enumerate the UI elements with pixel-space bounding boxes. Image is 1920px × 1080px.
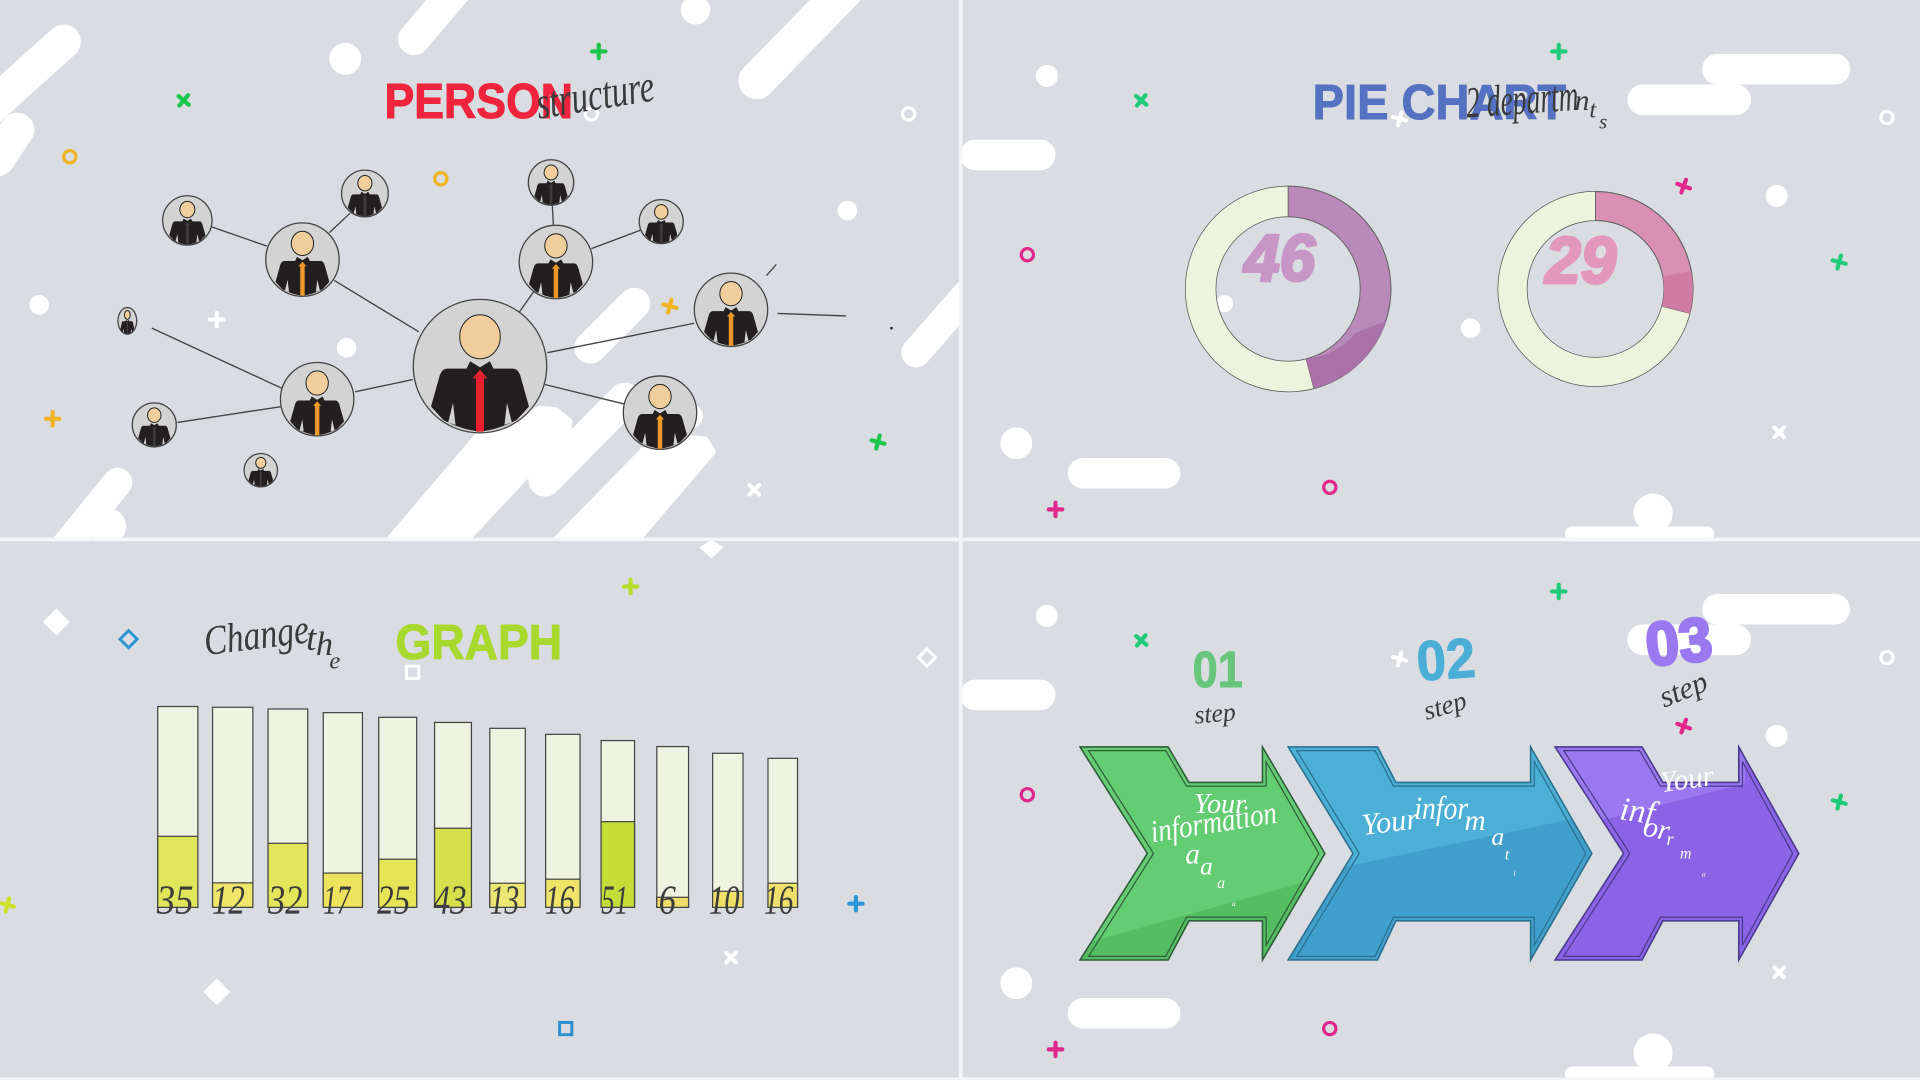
step 03 heading: 03 [1642,605,1715,679]
background shapes: graph panel [43,540,936,1005]
person: right lead [694,273,768,346]
arrow text: a [1217,875,1225,892]
bar: 51 [601,741,635,923]
arrow text: Your [1360,801,1420,842]
arrow text: t [1505,847,1510,864]
bar: 17 [323,713,362,923]
title: Change the GRAPH: Change [201,607,311,665]
arrow text: m [1680,845,1691,862]
connecting lines [152,204,846,422]
bar: 12 [212,707,253,923]
arrow: step 3 purple [1553,744,1799,960]
arrow text [1618,760,1717,879]
arrow text: or [1641,811,1673,847]
arrow: step 1 green [1078,747,1329,962]
title: Change the GRAPH: h [316,625,333,663]
value: 29: 29 [1543,224,1617,298]
donut chart: 29 [1512,192,1693,372]
person: team member [163,196,212,245]
markers: steps panel [1021,585,1847,1056]
bar: 17: 17 [323,877,352,923]
person: lower left lead [280,362,354,436]
step 01 heading [1193,640,1243,730]
bar: 32 [267,709,308,923]
person: central manager [413,299,547,433]
bar: 16: 16 [545,877,574,923]
donut chart: 46 [1201,186,1391,389]
arrow text [1148,789,1279,908]
bar: 6: 6 [659,877,676,923]
bar: 16 [764,758,798,923]
title: PIE CHART 2 department: PIE CHART [1313,76,1566,130]
bar: 43 [433,722,471,923]
person: lower right lead [623,376,697,449]
title: Change the GRAPH [201,607,562,675]
title: Change the GRAPH: GRAPH [396,616,562,670]
bar: 16: 16 [764,877,794,923]
bar: 10: 10 [709,877,740,923]
step 01 heading: 01 [1193,640,1243,698]
person: team member [342,170,388,217]
person: team member [132,403,176,447]
markers: graph panel [0,580,863,1035]
person: upper right lead [519,225,593,299]
segment: 29 percent [1596,192,1693,313]
step 01 heading: step [1193,697,1237,730]
arrow text: a [1232,899,1236,908]
arrow text: infor [1414,791,1468,827]
arrow text: information [1148,795,1279,849]
arrow text: a [1200,851,1213,880]
title: PIE CHART 2 department: t [1589,97,1597,124]
bar: 16 [545,734,580,923]
arrow text: a [1491,822,1504,851]
bar: 43: 43 [433,877,467,923]
title: PIE CHART 2 department: s [1599,110,1607,134]
bar: 35 [156,707,198,923]
step 02 heading: 02 [1414,626,1477,693]
background shapes: pie chart panel [960,54,1893,541]
arrow: step 2 blue [1286,747,1594,962]
person: team member [244,454,278,487]
title: PERSON structure: structure [533,61,658,129]
step 02 heading [1414,626,1477,726]
organisation network [118,160,893,487]
markers: person panel [46,45,886,499]
person: team member [639,200,683,244]
title: PERSON structure [384,61,658,129]
bar: 6 [657,747,689,923]
bar chart [156,707,798,923]
markers: pie chart panel [1021,45,1847,516]
arrow text: m [1464,805,1486,837]
background shapes: person panel [0,0,967,549]
value: 46: 46 [1242,221,1316,295]
arrow text: a [1702,870,1706,879]
bar: 25: 25 [377,877,410,923]
title: Change the GRAPH: t [306,617,317,658]
bar: 25 [377,717,417,923]
person: appearing dot [890,327,893,329]
person: appearing member [118,307,137,334]
person: team member [528,160,574,205]
arrow text: i [1513,868,1516,878]
title: PIE CHART 2 department: n [1575,85,1589,117]
bar: 13: 13 [490,877,519,923]
step 02 heading: step [1420,685,1470,726]
bar: 51: 51 [601,877,628,923]
person: upper left lead [266,223,339,296]
arrow text: Your [1658,760,1717,799]
bar: 10 [709,753,743,923]
background shapes: steps panel [960,594,1893,1080]
bar: 32: 32 [267,877,302,923]
bar: 35: 35 [156,877,193,923]
bar: 13 [490,728,525,923]
arrow text: r [1667,829,1675,849]
step 03 heading: step [1654,664,1712,714]
step 03 heading [1642,605,1715,714]
segment: 46 percent [1288,186,1391,389]
title: PIE CHART 2 department: 2 departm [1464,71,1580,128]
arrow text: inf [1618,791,1661,832]
title: Change the GRAPH: e [329,648,340,675]
bar: 12: 12 [212,877,245,923]
title: PERSON structure: PERSON [384,75,573,129]
arrow text: a [1185,838,1200,870]
arrow text: Your [1194,789,1247,820]
arrow text [1360,791,1516,878]
